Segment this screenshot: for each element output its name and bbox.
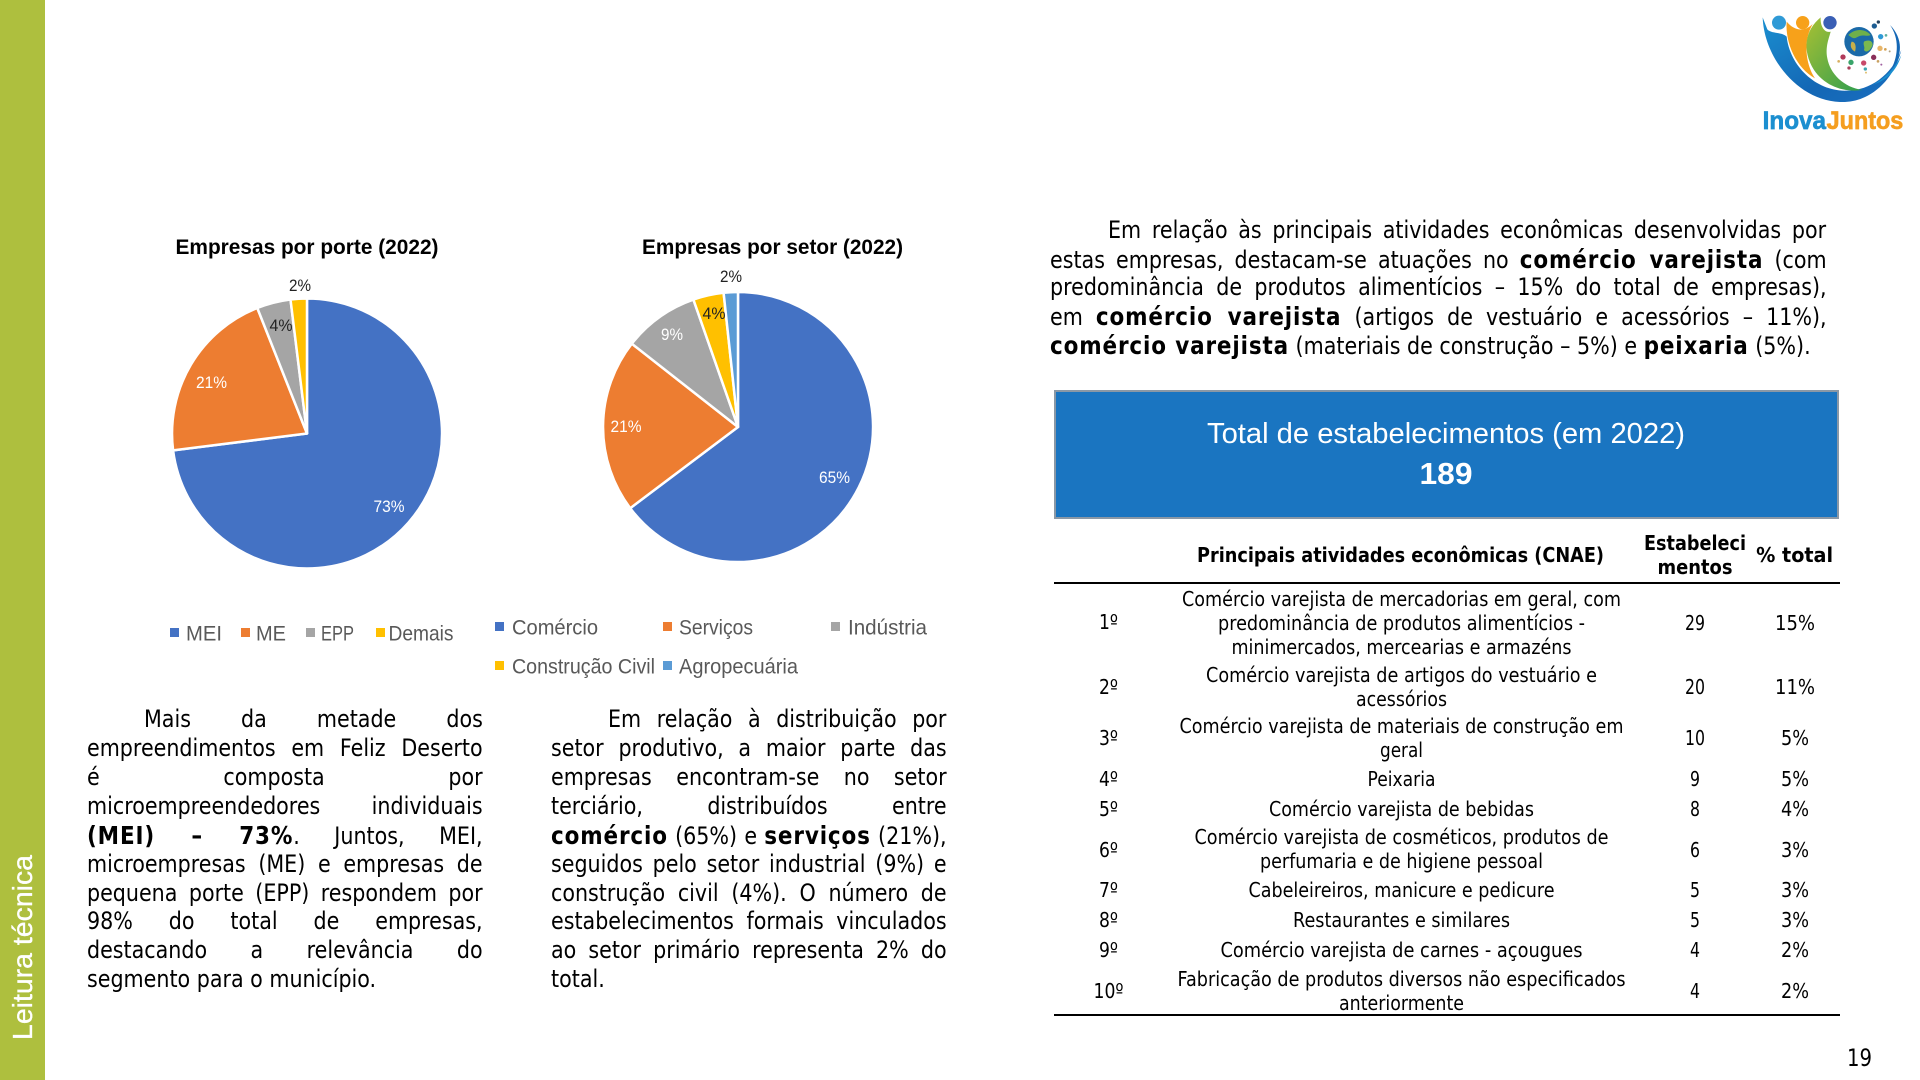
row 3: Comércio varejista de materiais de construção em [1180,714,1624,738]
data labels: setor: 21% [610,417,642,436]
legend: porte: MEI [186,622,222,646]
text block: porte paragraph: (MEI) – 73%. Juntos, MEI, [87,821,483,850]
legend: setor: Construção Civil [512,656,655,678]
table header [1054,531,1840,584]
text block: setor paragraph: ao setor primário representa 2% do [551,936,947,964]
row 4: 5% [1781,767,1809,791]
chart title: porte: Empresas por porte (2022) [176,236,438,259]
data labels: setor: 65% [819,468,850,487]
row 2: 11% [1775,675,1815,699]
text block: porte paragraph: destacando a relevância do [87,936,483,964]
callout: Total de estabelecimentos: 189 [1420,456,1472,491]
data labels: porte: 4% [270,316,292,335]
row 8: 5 [1690,908,1700,932]
table header: mentos [1658,555,1732,579]
text block: porte paragraph: Mais da metade dos [144,705,483,733]
chart: Empresas por porte (2022) [170,236,454,646]
text block: setor paragraph: estabelecimentos formais vinculados [551,907,947,935]
legend: porte: Demais [388,622,454,646]
row 5: 8 [1690,797,1700,821]
text block: porte paragraph: empreendimentos em Feliz Deserto [87,734,483,762]
row 10: 4 [1690,979,1700,1003]
legend: porte [170,622,454,646]
text block: setor paragraph: setor produtivo, a maior parte das [551,734,947,762]
row 5: 4% [1781,797,1809,821]
row 9: Comércio varejista de carnes - açougues [1220,938,1582,962]
chart title: setor: Empresas por setor (2022) [642,236,903,259]
row 9 [1099,938,1809,962]
legend: setor: Comércio [512,616,598,640]
text block: atividades paragraph: predominância de produtos alimentícios – 15% do total de empresas), [1050,273,1827,301]
row 6 [1099,825,1809,873]
data labels: setor: 4% [702,304,726,323]
legend: setor: Agropecuária [679,656,798,678]
text block: setor paragraph: construção civil (4%). O número de [551,878,947,906]
callout: Total de estabelecimentos: Total de estabelecimentos (em 2022) [1207,418,1685,450]
row 6: 3% [1781,838,1809,862]
legend: setor: Serviços [679,616,753,640]
sidebar: Leitura técnica [0,0,45,1080]
row 1: 29 [1685,611,1705,635]
row 10: Fabricação de produtos diversos não especificados [1178,967,1626,991]
text block: porte paragraph: 98% do total de empresas, [87,907,483,935]
row 8: 3% [1781,908,1809,932]
row 6: perfumaria e de higiene pessoal [1260,849,1543,873]
row 9: 9º [1099,938,1118,962]
logo: InovaJuntos [1763,16,1903,135]
row 3 [1099,714,1809,762]
data labels: porte: 73% [374,497,404,516]
pie: porte [172,298,442,568]
row 10: 10º [1094,979,1124,1003]
legend: setor: Indústria [848,616,927,640]
text block: atividades paragraph: estas empresas, destacam-se atuações no comércio varejista (com [1050,245,1827,274]
text block: setor paragraph: total. [551,965,605,993]
row 3: 5% [1781,726,1809,750]
text block: porte paragraph: segmento para o município. [87,965,376,993]
table header: Principais atividades econômicas (CNAE) [1197,543,1604,567]
data labels: setor: 2% [720,267,742,286]
row 8 [1099,908,1809,932]
row 3: 3º [1099,726,1118,750]
table: principais atividades econômicas [1054,531,1840,1016]
row 9: 4 [1690,938,1700,962]
text block: setor paragraph: Em relação à distribuição por [608,705,947,733]
row 1: Comércio varejista de mercadorias em geral, com [1182,587,1621,611]
legend: setor [495,616,927,678]
row 5: Comércio varejista de bebidas [1269,797,1534,821]
row 8: 8º [1099,908,1118,932]
row 4 [1099,767,1809,791]
row 3: geral [1380,738,1423,762]
logo: InovaJuntos: Inova [1763,107,1827,135]
row 1: 15% [1775,611,1815,635]
table header: % total [1756,543,1833,567]
text block: porte paragraph: é composta por [87,763,483,791]
row 1: 1º [1099,610,1118,634]
text block: setor paragraph: seguidos pelo setor industrial (9%) e [551,850,947,878]
row 1 [1099,587,1815,659]
data labels: porte [196,276,404,516]
row 6: Comércio varejista de cosméticos, produtos de [1194,825,1608,849]
row 6: 6º [1099,838,1118,862]
row 7: Cabeleireiros, manicure e pedicure [1248,878,1554,902]
legend: porte: EPP [321,622,354,646]
row 3: 10 [1685,726,1705,750]
row 5: 5º [1099,797,1118,821]
row 8: Restaurantes e similares [1293,908,1510,932]
page number: 19 [1847,1044,1872,1072]
row 1: minimercados, mercearias e armazéns [1232,635,1572,659]
text block: atividades paragraph: comércio varejista (materiais de construção – 5%) e peixaria (5%). [1050,331,1811,360]
row 7 [1099,878,1809,902]
row 7: 3% [1781,878,1809,902]
row 2: 2º [1099,675,1118,699]
legend: porte: ME [256,622,286,646]
row 10: anteriormente [1339,991,1464,1015]
row 2 [1099,663,1815,711]
row 4: 9 [1690,767,1700,791]
row 4: 4º [1099,767,1118,791]
text block: setor paragraph: terciário, distribuídos entre [551,792,947,820]
row 5 [1099,797,1809,821]
row 2: 20 [1685,675,1705,699]
data labels: porte: 21% [196,373,227,392]
text block: porte paragraph: microempreendedores individuais [87,792,483,820]
text block: setor paragraph: comércio (65%) e serviços (21%), [551,821,947,850]
row 7: 5 [1690,878,1700,902]
row 7: 7º [1099,878,1118,902]
text block: setor paragraph: empresas encontram-se no setor [551,763,947,791]
row 6: 6 [1690,838,1700,862]
table header: Estabeleci [1644,531,1746,555]
row 10 [1054,967,1840,1016]
row 2: Comércio varejista de artigos do vestuário e [1206,663,1597,687]
callout: Total de estabelecimentos [1055,391,1838,518]
data labels: setor [610,267,850,487]
row 4: Peixaria [1368,767,1436,791]
data labels: setor: 9% [661,325,683,344]
row 10: 2% [1781,979,1809,1003]
row 2: acessórios [1356,687,1447,711]
data labels: porte: 2% [289,276,311,295]
logo: InovaJuntos: Juntos [1827,107,1903,135]
pie: setor [603,292,873,562]
chart: Empresas por setor (2022) [495,236,927,678]
row 9: 2% [1781,938,1809,962]
text block: porte paragraph: microempresas (ME) e empresas de [87,850,483,878]
text block: atividades paragraph: Em relação às principais atividades econômicas desenvolvidas por [1108,216,1826,244]
sidebar: Leitura técnica: Leitura técnica [7,855,38,1040]
text block: atividades paragraph: em comércio varejista (artigos de vestuário e acessórios – 11%), [1050,302,1827,331]
row 1: predominância de produtos alimentícios - [1218,611,1585,635]
text block: porte paragraph: pequena porte (EPP) respondem por [87,878,483,906]
